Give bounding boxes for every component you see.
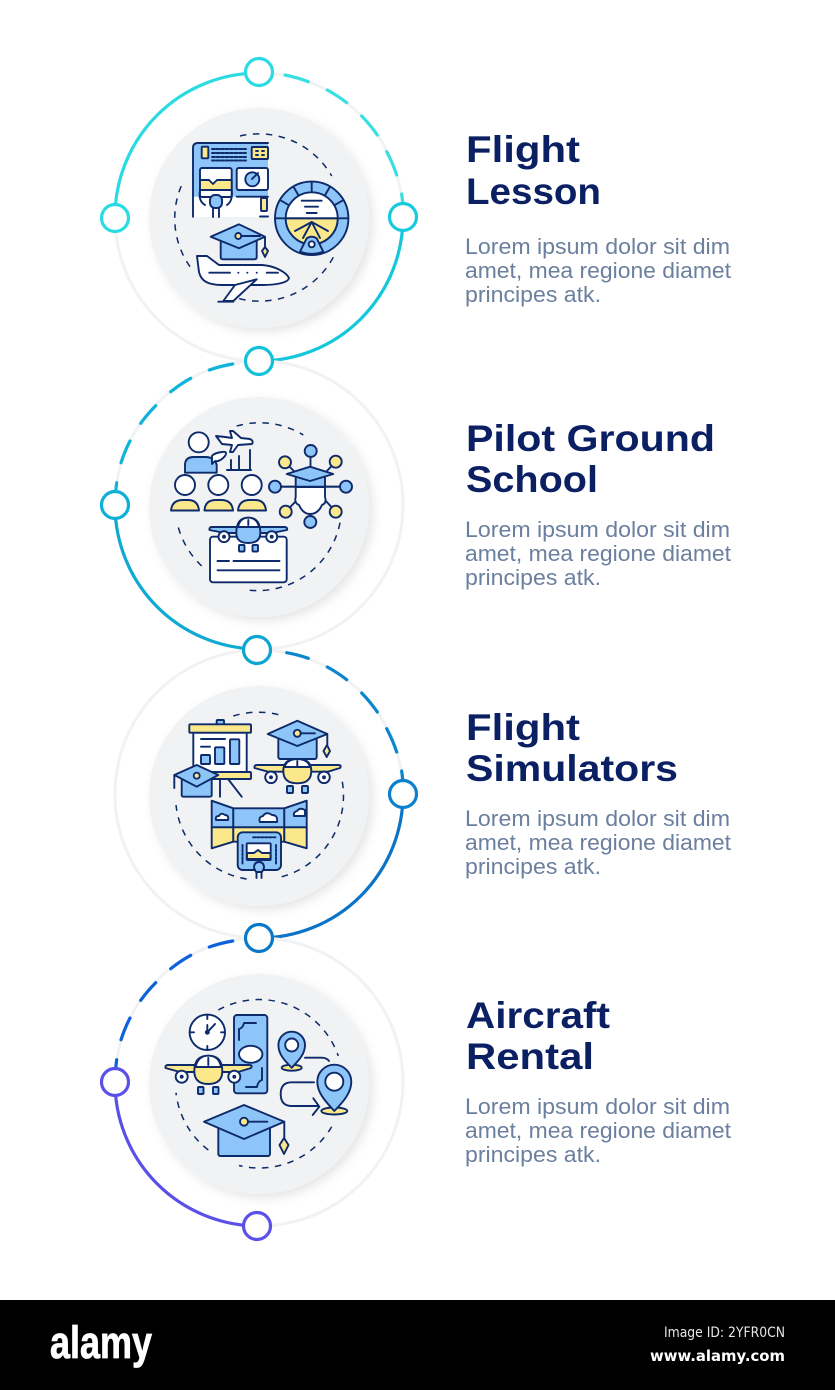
panel: flight lesson [102,58,731,361]
text: rental description: amet, mea regione diamet [465,1118,731,1143]
heading: pilot ground school: Pilot Ground [466,418,715,459]
text: simulators description: Lorem ipsum dolor sit dim [465,806,730,831]
icon: rental plane [165,1056,252,1094]
logo: alamy: alamy [50,1317,152,1368]
text: website: www.alamy.com [650,1347,785,1365]
text: flight lesson description: principes atk. [465,282,601,307]
panel: flight simulators [115,636,731,938]
text: simulators description: amet, mea regione diamet [465,830,731,855]
arc: rental progress [102,924,272,1240]
panel: aircraft rental [102,924,731,1240]
panel: pilot ground school [102,348,731,649]
icon: graduate network [269,445,352,528]
text: ground school description: Lorem ipsum dolor sit dim [465,517,730,542]
text: flight lesson description: Lorem ipsum dolor sit dim [465,234,730,259]
heading: aircraft rental: Aircraft [466,995,610,1036]
icon: large graduation cap [204,1105,288,1156]
icon: simulator screens [212,801,307,878]
text: simulators description: principes atk. [465,854,601,879]
arc: simulators progress [244,636,416,938]
text: ground school description: principes atk. [465,565,601,590]
text: image id: Image ID: 2YFR0CN [664,1325,785,1341]
heading: flight simulators: Flight [466,707,580,748]
text: rental description: Lorem ipsum dolor sit dim [465,1094,730,1119]
heading: pilot ground school: School [466,459,598,500]
icon: plane with cap [254,721,341,793]
arc: lesson progress [102,58,416,361]
icon: airplane [197,256,289,302]
icon: instructor and students [171,431,266,510]
text: ground school description: amet, mea regione diamet [465,541,731,566]
icon: small graduation cap [174,765,218,797]
heading: flight lesson: Lesson [466,171,601,212]
icon: cockpit panel [193,143,268,217]
icon: attitude gauge [275,182,348,255]
icon: clock [190,1015,225,1050]
icon: graduation cap [211,224,268,259]
text: rental description: principes atk. [465,1142,601,1167]
heading: aircraft rental: Rental [466,1036,594,1077]
arc: ground school progress [102,348,272,649]
text: flight lesson description: amet, mea regione diamet [465,258,731,283]
icon: banknote [234,1015,267,1093]
watermark footer bar [0,1300,835,1390]
heading: flight simulators: Simulators [466,748,678,789]
icon: route with location pins [278,1032,351,1115]
heading: flight lesson: Flight [466,129,580,170]
icon: plane with license card [209,518,287,582]
icon: presentation board [189,720,251,797]
